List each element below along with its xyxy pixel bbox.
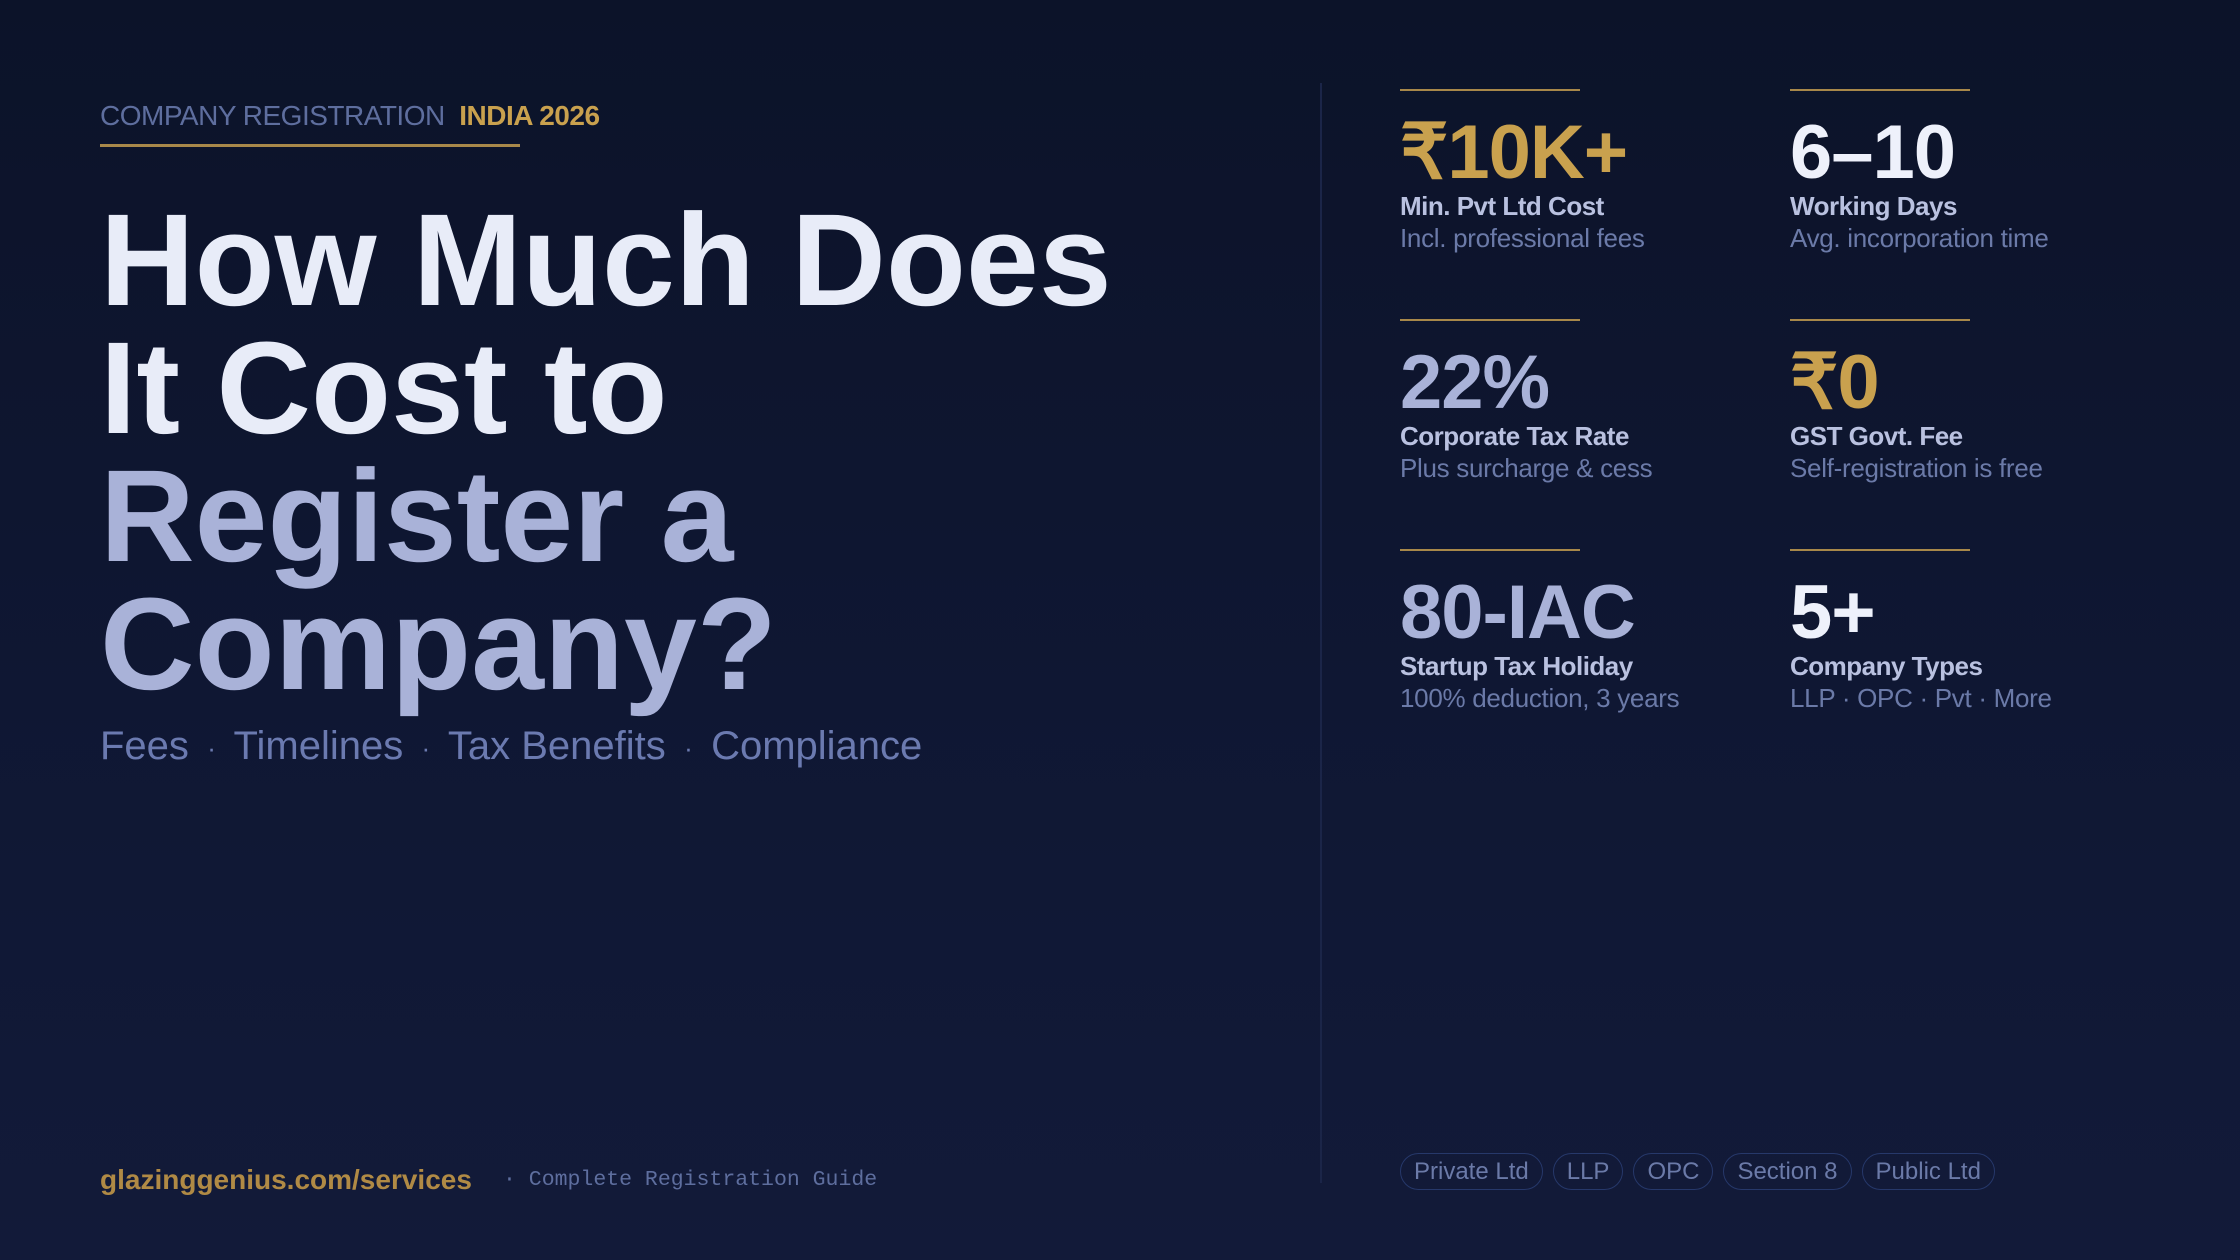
stat: gst fee — [1790, 319, 2043, 483]
company type pills: Section 8 — [1737, 1158, 1838, 1185]
stat: tax rate: 22% — [1400, 340, 1549, 425]
title: How Much Does — [100, 186, 1112, 333]
company type pills: Public Ltd — [1876, 1158, 1981, 1185]
stat: min cost: Incl. professional fees — [1400, 223, 1645, 253]
company type pills: OPC — [1647, 1158, 1699, 1185]
stat: company types — [1790, 549, 2052, 713]
stat: gst fee: Self-registration is free — [1790, 453, 2043, 483]
stat: company types: 5+ — [1790, 570, 1875, 655]
title: Company? — [100, 570, 777, 717]
footer url: glazinggenius.com/services — [100, 1164, 472, 1195]
stat: working days: Working Days — [1790, 191, 1957, 221]
stat: 80-IAC — [1400, 549, 1679, 713]
stat: 80-IAC: 80-IAC — [1400, 570, 1635, 655]
stat: tax rate: Corporate Tax Rate — [1400, 421, 1629, 451]
divider — [1320, 83, 1322, 1183]
company type pills: Private Ltd — [1414, 1158, 1529, 1185]
stat: tax rate: Plus surcharge & cess — [1400, 453, 1652, 483]
company type pills — [1400, 1153, 1995, 1190]
header kicker: COMPANY REGISTRATION INDIA 2026 — [100, 100, 600, 131]
stat: company types: Company Types — [1790, 651, 1982, 681]
company type pills: LLP — [1567, 1158, 1609, 1185]
title: It Cost to — [100, 314, 668, 461]
stat: gst fee: GST Govt. Fee — [1790, 421, 1963, 451]
kicker underline — [100, 144, 520, 147]
title: Register a — [100, 442, 733, 589]
footer guide text: · Complete Registration Guide — [503, 1168, 877, 1192]
stat: company types: LLP · OPC · Pvt · More — [1790, 683, 2052, 713]
stat: 80-IAC: 100% deduction, 3 years — [1400, 683, 1679, 713]
stat: min cost: Min. Pvt Ltd Cost — [1400, 191, 1604, 221]
stat: working days: Avg. incorporation time — [1790, 223, 2049, 253]
stat: working days — [1790, 89, 2049, 253]
subtitle: Fees · Timelines · Tax Benefits · Compliance — [100, 724, 922, 768]
stat: tax rate — [1400, 319, 1652, 483]
stat: working days: 6–10 — [1790, 110, 1955, 195]
stat: min cost: ₹10K+ — [1400, 110, 1627, 195]
stat: min cost — [1400, 89, 1645, 253]
stat: 80-IAC: Startup Tax Holiday — [1400, 651, 1633, 681]
stat: gst fee: ₹0 — [1790, 340, 1879, 425]
title — [100, 186, 1112, 717]
